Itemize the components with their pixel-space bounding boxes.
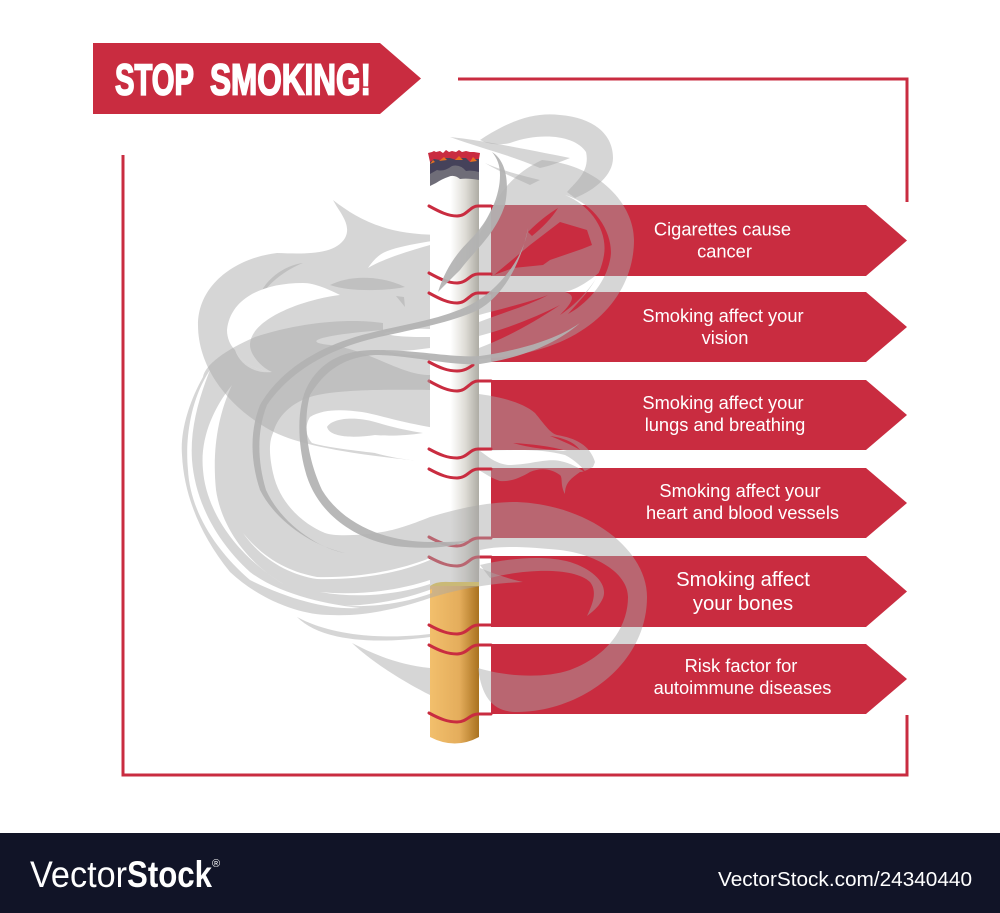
burning ember [428,150,480,162]
label: autoimmune: autoimmune diseases [654,677,831,698]
label: vision: vision [702,327,748,348]
footer bar [0,833,1000,913]
ash [430,160,479,186]
frame lines [123,79,907,775]
label: heart: Smoking affect your [659,480,821,501]
footer logo: ® [212,858,220,870]
footer url: VectorStock.com/24340440 [718,869,972,891]
smoke over cigarette [182,321,647,712]
label: cancer: cancer [697,240,752,262]
label: lungs: Smoking affect your [642,392,804,413]
smoke behind cigarette [198,114,634,494]
ember flames [430,156,477,164]
label: autoimmune: Risk factor for [685,655,797,676]
label: heart: heart and blood vessels [646,502,839,523]
label: bones: your bones [693,593,793,615]
title banner [93,43,421,114]
cigarette [428,150,480,744]
arrow panels [491,205,907,714]
title banner: STOP [115,56,194,104]
label: vision: Smoking affect your [642,305,804,326]
burnt band [430,158,479,174]
label: cancer: Cigarettes cause [654,218,791,240]
cigarette filter [430,586,479,744]
smoke wisps [252,152,580,553]
cigarette paper [430,160,479,585]
filter top edge [430,582,479,586]
arrow labels [642,218,839,698]
connector lines [429,206,491,722]
label: lungs: lungs and breathing [645,414,805,435]
label: bones: Smoking affect [676,569,810,591]
title banner: SMOKING! [210,56,371,104]
footer logo: VectorStock [30,854,228,895]
